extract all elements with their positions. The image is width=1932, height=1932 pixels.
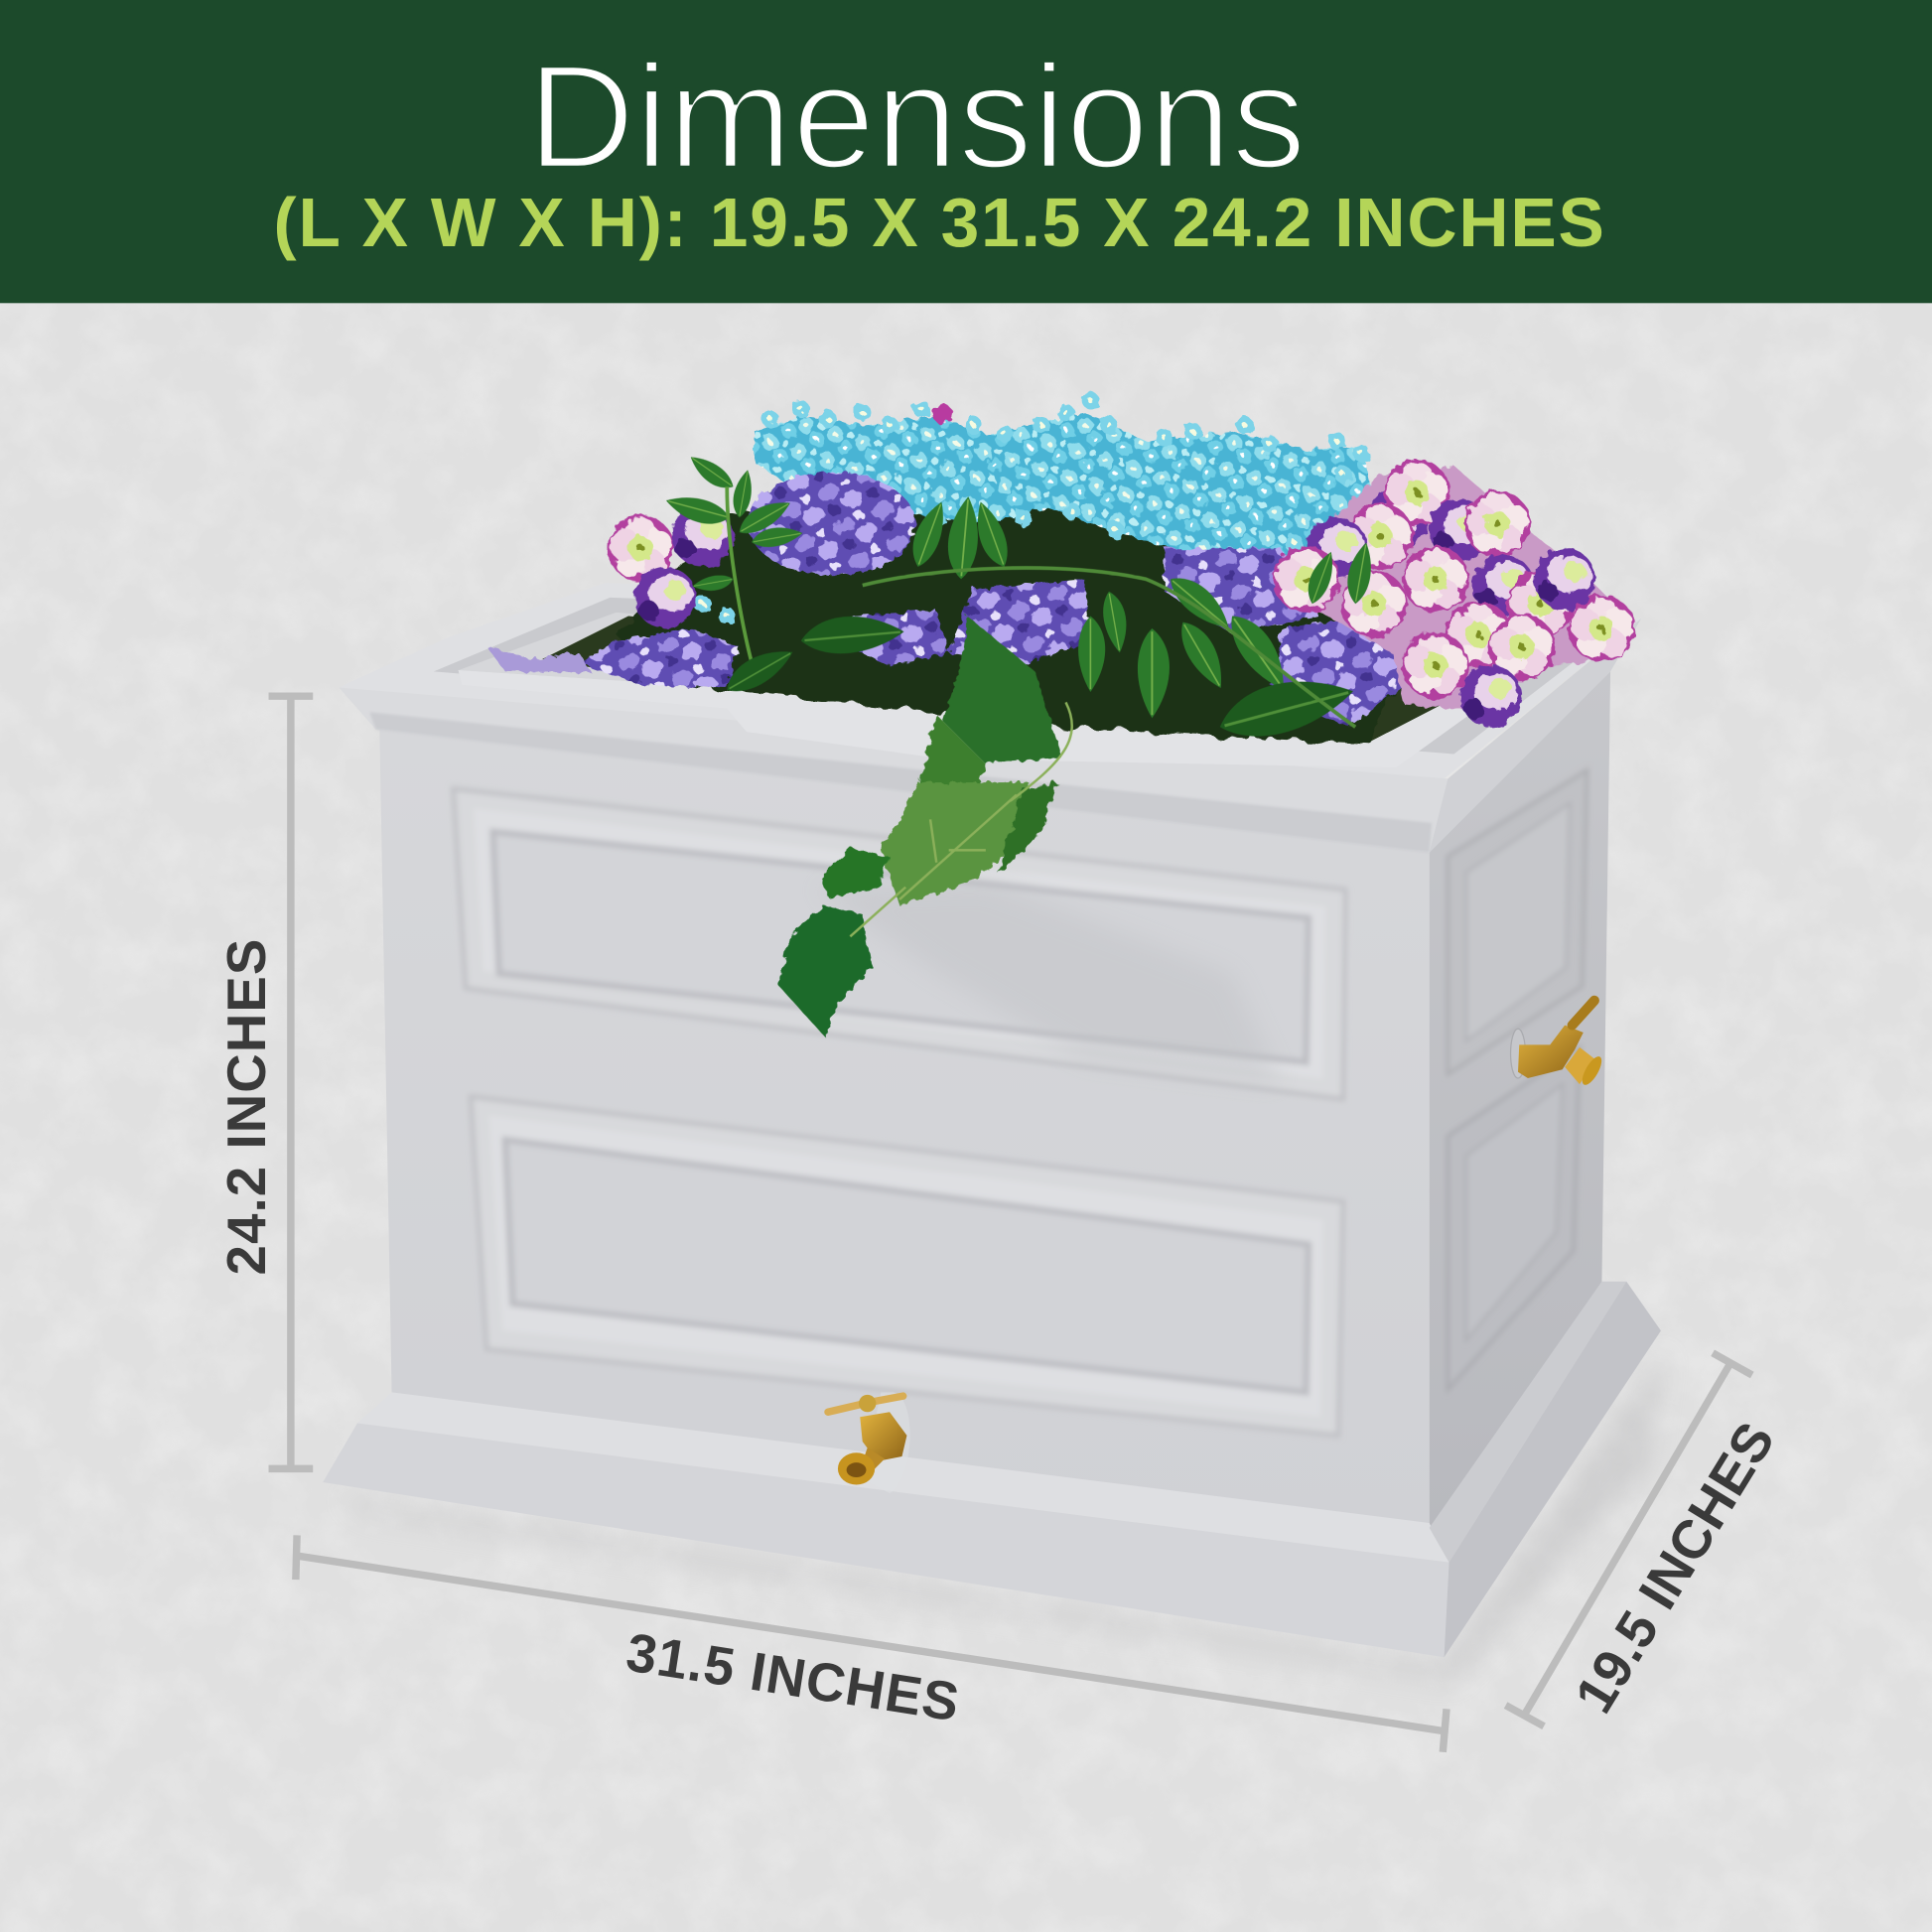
planter product illustration [323, 392, 1666, 1682]
purple flowers [486, 472, 1405, 727]
subtitle: overall dimensions: (L X W X H): 19.5 X 31.5 X 24.2 INCHES [274, 184, 1604, 261]
length label: 31.5 INCHES [622, 1621, 963, 1732]
tray front lip over cornice [459, 670, 1507, 767]
planter top and basin [339, 583, 1641, 778]
blue flowers [694, 392, 1370, 624]
planter base molding [323, 1282, 1661, 1657]
trailing vine [778, 617, 1072, 1037]
flowers and foliage [486, 392, 1635, 749]
title: Dimensions [527, 34, 1307, 200]
foliage mass [617, 486, 1399, 745]
side faucet [1511, 1001, 1605, 1088]
dimension: width [1506, 1353, 1786, 1726]
planter right side [1430, 671, 1610, 1530]
dimension: length [296, 1535, 1447, 1752]
leaves on flowers [663, 450, 1376, 749]
height label: 24.2 INCHES [216, 939, 277, 1276]
planter front face [379, 727, 1430, 1530]
front faucet [828, 1392, 910, 1493]
lower panel [471, 1097, 1343, 1436]
planter cornice [339, 619, 1641, 853]
header band [0, 0, 1932, 303]
width label: 19.5 INCHES [1564, 1412, 1786, 1724]
pink and lime flowers [608, 404, 1635, 727]
dimension: height [216, 696, 313, 1468]
upper panel [454, 788, 1345, 1099]
